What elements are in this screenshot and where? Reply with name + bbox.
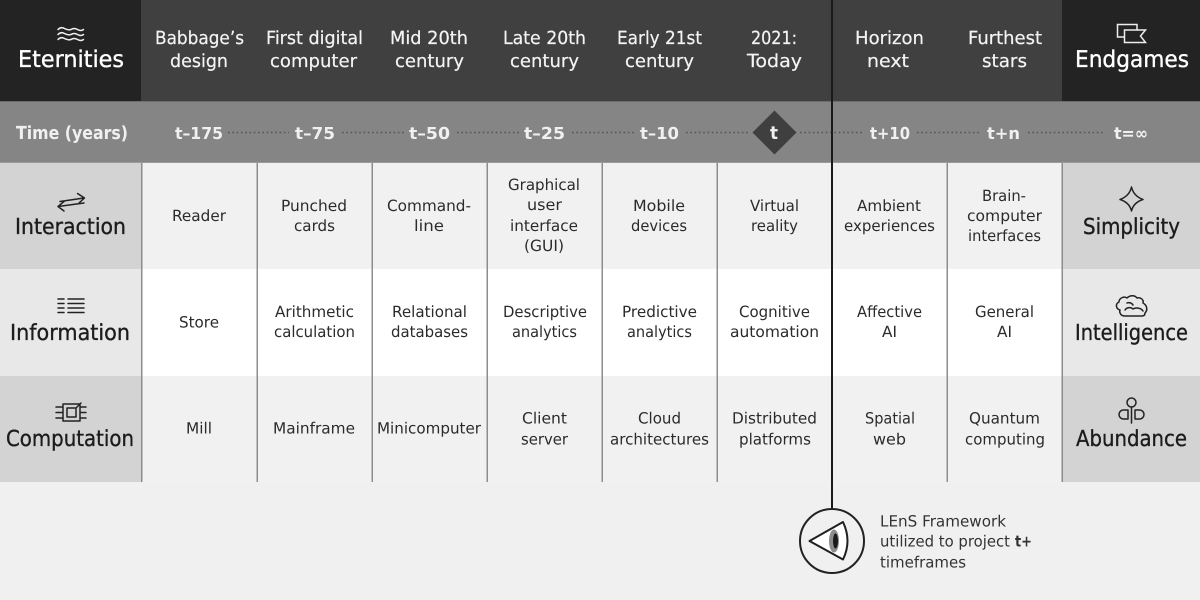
row 2 cells: Information: Arithmetic [275, 303, 354, 321]
time row [0, 101, 1200, 163]
callout: LEnS Framework note: utilized to project [880, 532, 1010, 550]
row 2 cells: Information: Predictive [622, 303, 697, 321]
row 3 cells: Computation: platforms [739, 430, 811, 448]
row 3 cells: Computation: Spatial [865, 410, 915, 428]
era: Furthest stars: stars [982, 51, 1027, 72]
row heading: Simplicity: Simplicity [1083, 215, 1180, 240]
panel: Endgames heading: Endgames [1075, 47, 1189, 73]
row 1 cells: Interaction: Punched [281, 197, 347, 215]
row 1 cells: Interaction: Command- [387, 197, 471, 215]
callout: LEnS Framework note: timeframes [880, 554, 966, 572]
row 2 cells: Information: Store [179, 314, 219, 332]
panel: Endgames heading [1062, 0, 1200, 101]
panel: Eternities heading [0, 0, 141, 101]
present-day divider line [831, 0, 833, 510]
t-10: t–10 [640, 124, 679, 143]
era: Late 20th century [503, 28, 586, 72]
row 3 cells: Computation: Mainframe [273, 420, 355, 438]
row heading: Abundance [1076, 398, 1187, 452]
row 2 cells: Information: AI [997, 323, 1012, 341]
era: 2021 Today [746, 28, 802, 72]
row 3 cells: Computation: architectures [610, 430, 709, 448]
row 1 cells: Interaction: line [414, 217, 444, 235]
row 1 cells: Interaction: computer [967, 207, 1043, 225]
era: Babbage's design [155, 28, 244, 72]
row heading: Intelligence: Intelligence [1075, 321, 1188, 346]
row 3 cells: Computation: Minicomputer [377, 420, 482, 438]
row heading: Simplicity [1083, 187, 1180, 240]
row 2 cells: Information: AI [882, 323, 897, 341]
row 1 cells: Interaction: (GUI) [524, 237, 564, 255]
era: Mid 20th century: century [395, 51, 464, 72]
era: Furthest stars [968, 28, 1042, 72]
row 1 cells: Interaction: Graphical [508, 176, 580, 194]
t-75: t–75 [295, 124, 335, 143]
table body backgrounds [0, 163, 1200, 482]
row 1 cells: Interaction: Mobile [633, 197, 685, 215]
t-25: t–25 [524, 124, 565, 143]
row 1 cells: Interaction: Brain- [982, 187, 1026, 205]
row 1 cells: Interaction: Virtual [750, 197, 799, 215]
era: 2021 Today: 2021: [751, 28, 797, 49]
row 1 cells: Interaction: experiences [844, 217, 935, 235]
era: Early 21st century [617, 28, 702, 72]
era: First digital computer [266, 28, 363, 72]
t-50: t–50 [409, 124, 450, 143]
panel: Eternities heading: Eternities [18, 47, 124, 73]
row heading: Computation: Computation [6, 427, 134, 452]
row heading: Intelligence [1075, 296, 1188, 346]
row 3 cells: Computation: web [873, 430, 906, 448]
row 2 cells: Information: Descriptive [503, 303, 587, 321]
era: First digital computer: computer [270, 51, 358, 72]
row 1 cells: Interaction: cards [294, 217, 335, 235]
era: Mid 20th century [390, 28, 468, 72]
row 1 cells: Interaction: interface [510, 217, 578, 235]
row 2 cells: Information: Relational [392, 303, 467, 321]
t+10: t+10 [870, 124, 910, 143]
callout: LEnS Framework note: t+ [1015, 532, 1032, 550]
row 2 cells: Information: Cognitive [739, 303, 810, 321]
row 3 cells: Computation: Distributed [732, 410, 817, 428]
row 3 cells: Computation [186, 410, 1045, 448]
row heading: Computation [6, 403, 134, 452]
icon: LEnS eye [800, 509, 864, 573]
callout: LEnS Framework note: LEnS Framework [880, 512, 1006, 530]
row 2 cells: Information: analytics [627, 323, 692, 341]
t+n: t+n [987, 124, 1020, 143]
row 2 cells: Information: Affective [857, 303, 922, 321]
callout: LEnS Framework note [880, 512, 1032, 572]
row 1 cells: Interaction: devices [631, 217, 687, 235]
era: Early 21st century: century [625, 51, 694, 72]
row heading: Interaction: Interaction [15, 215, 126, 240]
time label: Time (years) [16, 123, 128, 144]
row heading: Interaction [15, 194, 126, 240]
t-175: t–175 [175, 124, 223, 143]
row 2 cells: Information: databases [391, 323, 468, 341]
era: Horizon next [855, 28, 924, 72]
row 3 cells: Computation: Mill [186, 420, 212, 438]
row 1 cells: Interaction: Reader [172, 207, 227, 225]
row 3 cells: Computation: computing [965, 430, 1045, 448]
row heading: Abundance: Abundance [1076, 427, 1187, 452]
row heading: Information [10, 299, 130, 346]
era: Early 21st century: Early 21st [617, 28, 702, 49]
row 2 cells: Information: General [975, 303, 1034, 321]
row 2 cells: Information: automation [730, 323, 819, 341]
era: Babbage's design: Babbage’s [155, 28, 244, 49]
t=infinity: t=∞ [1114, 124, 1148, 143]
row 1 cells: Interaction: user [527, 196, 563, 214]
row 1 cells: Interaction [172, 176, 1043, 255]
row 3 cells: Computation: server [521, 430, 569, 448]
header band: eras [0, 0, 1200, 101]
era: First digital computer: First digital [266, 28, 363, 49]
row 1 cells: Interaction: Ambient [857, 197, 921, 215]
row 1 cells: Interaction: reality [751, 217, 798, 235]
era: Furthest stars: Furthest [968, 28, 1042, 49]
era: Horizon next: next [867, 51, 909, 72]
row heading: Information: Information [10, 321, 130, 346]
today diamond marker [752, 110, 796, 154]
era: Late 20th century: century [510, 51, 579, 72]
era: Late 20th century: Late 20th [503, 28, 586, 49]
row 3 cells: Computation: Quantum [969, 410, 1040, 428]
row 3 cells: Computation: Cloud [638, 410, 681, 428]
today diamond marker: t [770, 123, 778, 144]
row 2 cells: Information [179, 303, 1034, 341]
era: Horizon next: Horizon [855, 28, 924, 49]
row 3 cells: Computation: Client [522, 410, 567, 428]
era: 2021 Today: Today [746, 51, 802, 72]
era: Mid 20th century: Mid 20th [390, 28, 468, 49]
era: Babbage's design: design [170, 51, 228, 72]
row 2 cells: Information: analytics [512, 323, 577, 341]
row 2 cells: Information: calculation [274, 323, 355, 341]
row 1 cells: Interaction: interfaces [968, 227, 1041, 245]
